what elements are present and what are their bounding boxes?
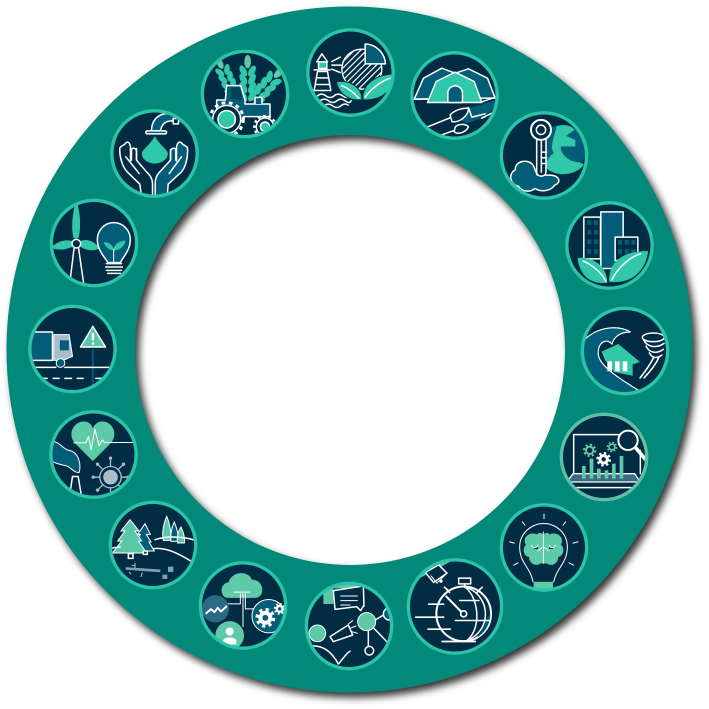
icon: wind turbine and light bulb — [50, 200, 137, 286]
warning sign — [80, 326, 105, 390]
wheat stalks — [215, 55, 282, 104]
person circle — [215, 621, 244, 650]
icon: cloud tree with globe, gear and person — [200, 563, 286, 650]
icon: truck, warning sign and road — [27, 306, 115, 392]
network — [357, 608, 390, 656]
heart — [71, 421, 114, 461]
lighthouse — [314, 54, 351, 107]
tent — [414, 68, 497, 102]
icon: city buildings and leaves — [567, 203, 652, 288]
bulb — [510, 514, 578, 592]
globe with gear — [252, 600, 285, 633]
chat bubble — [323, 583, 364, 611]
icon: thermometer, globe and cloud — [501, 113, 587, 198]
leaves — [336, 74, 392, 100]
wave — [584, 327, 639, 392]
person with tick — [309, 625, 350, 668]
icon: brain in light bulb — [501, 505, 587, 592]
megaphone — [330, 621, 357, 642]
brain folds — [531, 532, 556, 563]
stopwatch — [416, 578, 491, 641]
icon: tractor and wheat — [202, 51, 291, 137]
laptop — [567, 435, 641, 488]
icon: wave, house and tornado — [582, 308, 668, 397]
handshake — [427, 100, 497, 135]
brain — [524, 533, 563, 565]
hill lines — [110, 537, 196, 562]
connector lines — [227, 592, 254, 626]
icon: tent and handshake — [412, 53, 497, 138]
globe — [546, 124, 585, 174]
icon: lighthouse, pie chart and leaves — [308, 30, 396, 115]
light bulb — [97, 223, 130, 273]
virus — [92, 456, 130, 498]
truck — [27, 332, 72, 367]
bars — [582, 456, 623, 479]
cloud — [222, 573, 262, 598]
magnifier — [618, 431, 646, 460]
tractor body — [210, 86, 276, 137]
graduation cap — [425, 565, 447, 583]
icon: tap, water drop and hands — [112, 111, 198, 197]
tap — [146, 114, 198, 134]
leaves — [578, 251, 648, 283]
house — [602, 344, 640, 379]
water drop — [142, 136, 168, 163]
hands — [120, 142, 188, 197]
icon: heart, factory smoke and virus — [50, 412, 136, 498]
gears — [584, 442, 617, 465]
felled log and stumps — [126, 563, 173, 579]
icon: forest and felled log — [110, 502, 196, 588]
chimney — [70, 476, 82, 496]
tornado — [640, 333, 664, 378]
pulse line — [74, 429, 133, 450]
icon: megaphone, network and chat bubble — [306, 583, 395, 669]
icon: laptop with gears and bars — [561, 414, 647, 500]
buildings — [584, 212, 638, 268]
icon: stopwatch, globe and graduation cap — [408, 560, 502, 653]
smoke — [50, 441, 80, 473]
thermometer — [531, 120, 551, 176]
pie chart — [342, 44, 385, 89]
wind turbine — [50, 200, 100, 284]
zigzag circle — [202, 595, 229, 622]
trees — [112, 516, 185, 558]
road — [30, 367, 113, 378]
top patch — [420, 562, 450, 578]
cloud — [511, 161, 559, 191]
